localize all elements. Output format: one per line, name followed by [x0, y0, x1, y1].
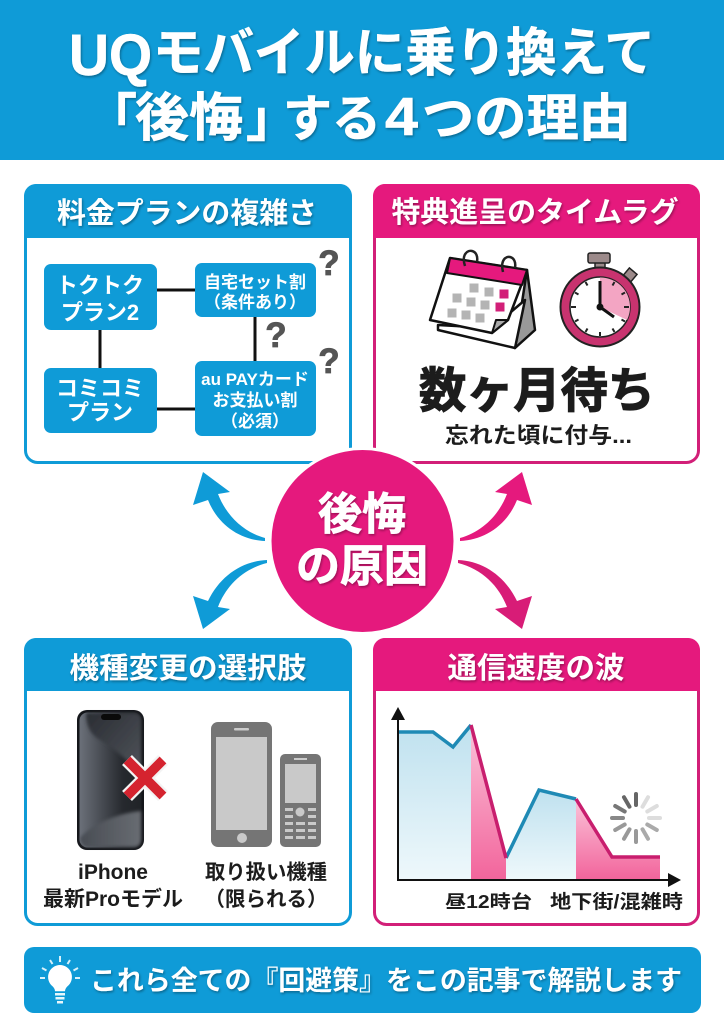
label: limited devices: [204, 861, 328, 911]
question marks: [265, 244, 340, 381]
plan box: komikomi: [44, 368, 157, 433]
panel: speed fluctuation: [373, 638, 700, 924]
line chart: [391, 707, 681, 887]
label: iPhone Pro: 最新Proモデル: [43, 887, 183, 911]
panel: bonus time lag: [373, 184, 700, 462]
big text: months of waiting: 数ヶ月待ち: [419, 365, 655, 418]
center circle: cause of regret: 後悔: [318, 490, 406, 539]
panel: pricing plan complexity: [24, 184, 352, 462]
title: 」: [246, 90, 297, 147]
arrow: bottom-left: [193, 560, 267, 629]
title: [69, 23, 655, 148]
title: 「: [86, 90, 137, 147]
label: iPhone Pro: iPhone: [78, 861, 148, 884]
icon: calendar: [430, 251, 535, 348]
arrows to panels: [193, 472, 532, 629]
title: つの理由: [422, 90, 631, 147]
discount box: home set: [195, 263, 316, 317]
panel heading: device: 機種変更の選択肢: [70, 652, 306, 685]
panel: device choice: [24, 638, 352, 924]
panel heading: time lag: 特典進呈のタイムラグ: [392, 196, 678, 229]
plan box: tokutoku: トクトク: [56, 273, 144, 298]
label: iPhone Pro: [43, 861, 183, 911]
plan box: tokutoku: プラン2: [61, 300, 139, 325]
discount box: home set: 自宅セット割: [204, 272, 306, 292]
axis label: noon: 昼12時台: [445, 891, 532, 912]
title: モバイルに乗り換えて: [153, 25, 655, 83]
label: limited devices: 取り扱い機種: [205, 861, 327, 884]
discount box: au PAY card: お支払い割: [212, 390, 298, 410]
icon: light bulb: [40, 956, 80, 1004]
icon: iPhone with cross: [77, 710, 163, 850]
question marks: ?: [318, 342, 340, 381]
discount box: au PAY card: [195, 361, 316, 436]
plan box: tokutoku: [44, 264, 157, 330]
icon: stopwatch: [560, 253, 640, 346]
question marks: ?: [265, 316, 287, 355]
arrow: bottom-right: [458, 560, 532, 629]
arrow: top-left: [193, 472, 265, 541]
center circle: cause of regret: の原因: [296, 542, 428, 591]
title: 4: [385, 87, 418, 147]
title: UQ: [69, 23, 152, 88]
label: limited devices: （限られる）: [204, 888, 328, 911]
icon: loading spinner: [612, 794, 660, 842]
discount box: au PAY card: （必須）: [221, 412, 289, 431]
plan box: komikomi: プラン: [67, 400, 133, 425]
connector lines: [100, 290, 255, 409]
footer text: これら全ての『回避策』をこの記事で解説します: [90, 966, 682, 996]
axis label: underground: 地下街/混雑時: [550, 891, 683, 913]
plan box: komikomi: コミコミ: [56, 376, 144, 401]
center circle: cause of regret: [268, 447, 456, 635]
header band: [0, 0, 724, 160]
panel heading: pricing: 料金プランの複雑さ: [57, 197, 317, 230]
icon: smartphone: [211, 722, 272, 847]
panel heading: speed: 通信速度の波: [448, 652, 624, 685]
title: 後悔: [135, 90, 243, 148]
discount box: home set: （条件あり）: [204, 292, 306, 312]
sub text: granted later: 忘れた頃に付与...: [445, 423, 632, 448]
arrow: top-right: [460, 472, 532, 541]
title: する: [283, 91, 381, 147]
question marks: ?: [318, 244, 340, 283]
footer banner: [24, 947, 701, 1013]
icon: feature phone: [280, 754, 321, 847]
discount box: au PAY card: au PAYカード: [201, 370, 309, 389]
